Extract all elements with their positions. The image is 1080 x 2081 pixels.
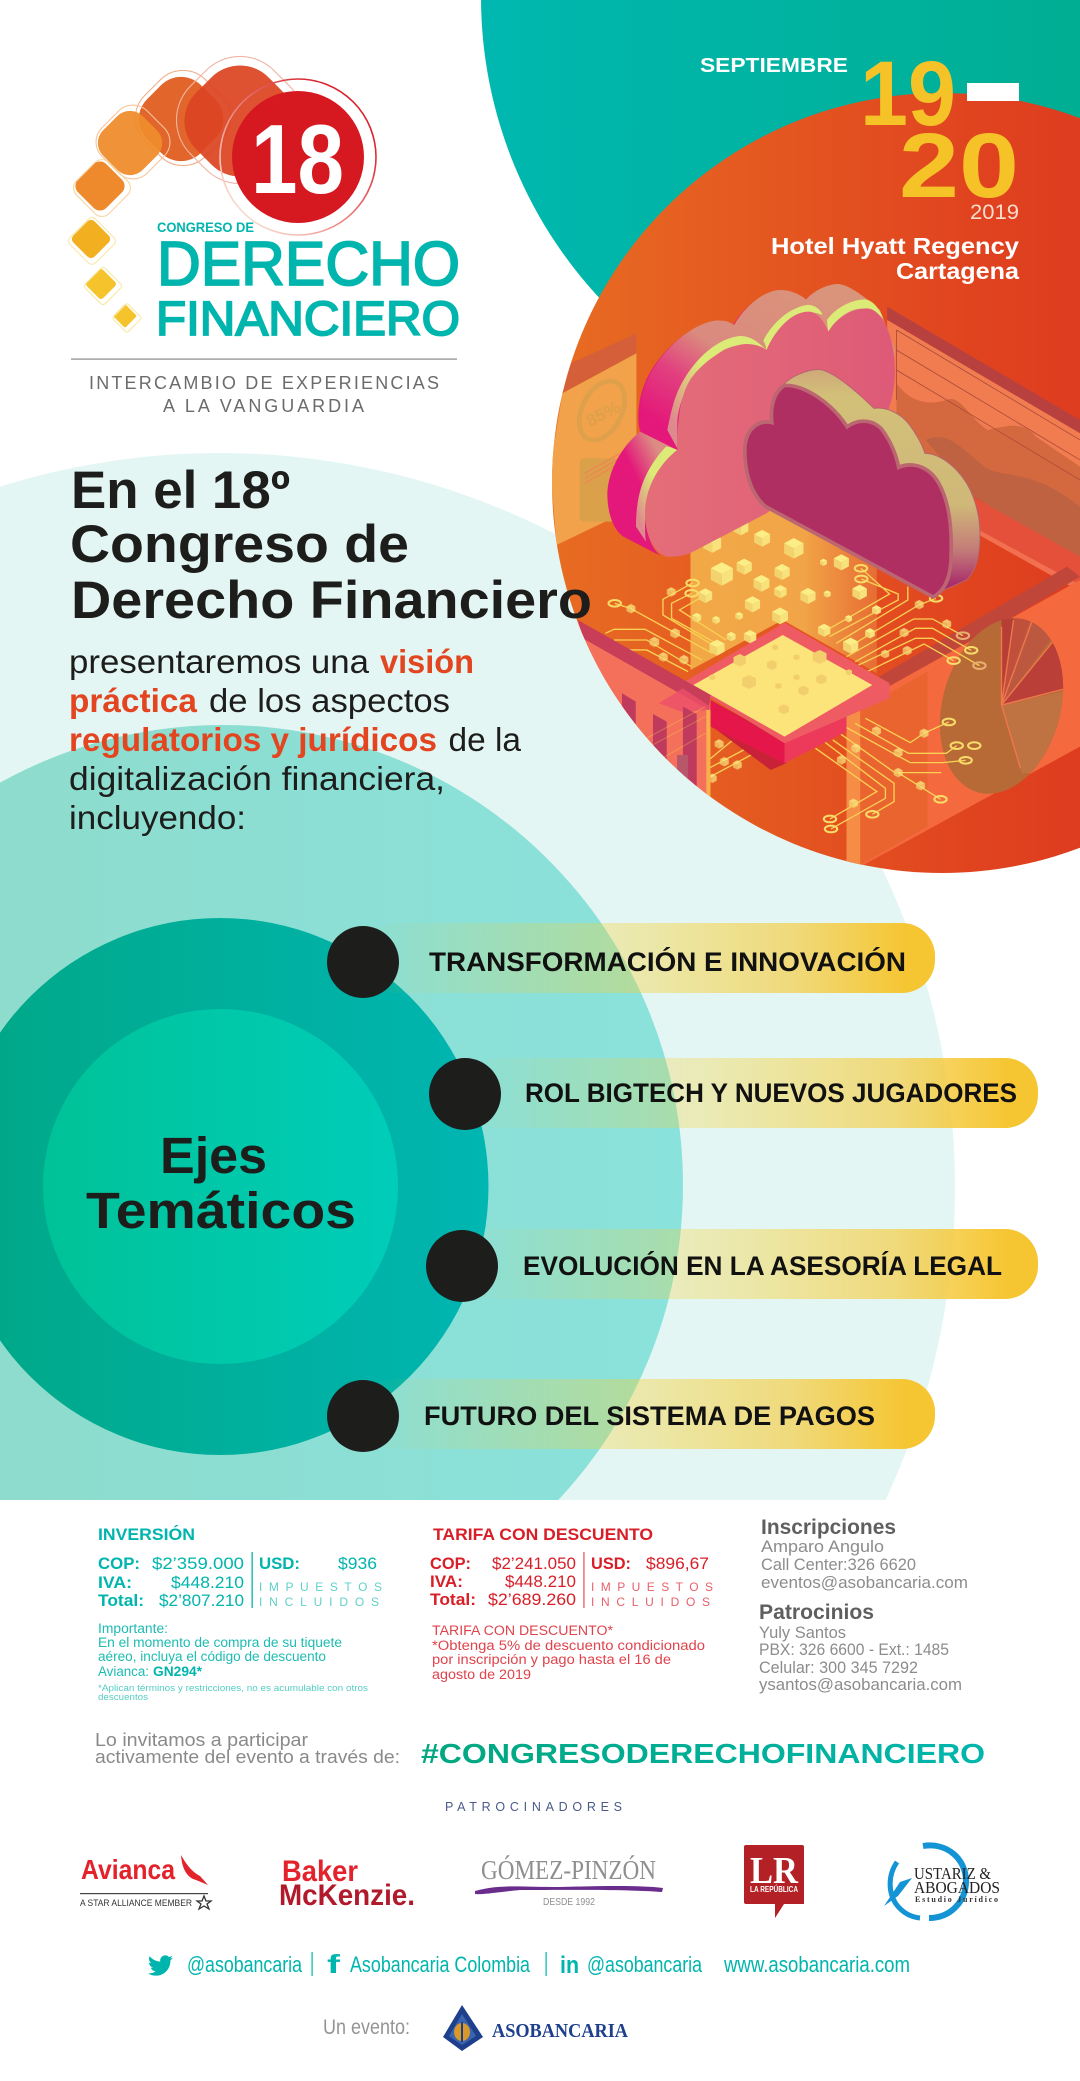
price table: $2’359.000 — [152, 1554, 244, 1573]
sponsor logo: Gómez-Pinzón — [475, 1855, 663, 1908]
sponsor logo: Baker McKenzie — [279, 1855, 415, 1912]
discount conditions: agosto de 2019 — [432, 1667, 531, 1682]
Asobancaria emblem — [443, 2005, 483, 2051]
intro paragraph: regulatorios y jurídicos — [69, 721, 437, 758]
linkedin handle: @asobancaria — [587, 1952, 703, 1977]
discount conditions — [432, 1623, 705, 1682]
discount price table — [430, 1552, 709, 1609]
logo: 18 Congreso de Derecho Financiero — [67, 37, 460, 416]
discount conditions: TARIFA CON DESCUENTO* — [432, 1623, 614, 1638]
purple cloud front face — [747, 387, 949, 595]
processor chip — [685, 623, 890, 770]
pink cloud front face — [645, 308, 895, 557]
price table — [98, 1552, 377, 1610]
hashtag: #CONGRESODERECHOFINANCIERO — [421, 1738, 985, 1769]
discount price table: $2’241.050 — [492, 1554, 576, 1573]
price table: Total: — [98, 1591, 144, 1610]
Asobancaria wordmark: ASOBANCARIA — [492, 2020, 629, 2042]
intro paragraph: de la — [448, 721, 522, 758]
sponsorships contact: ysantos@asobancaria.com — [759, 1675, 962, 1694]
logo wordmark: DERECHO — [157, 230, 460, 299]
sponsor logo: Gómez-Pinzón: DESDE 1992 — [543, 1896, 595, 1908]
registrations contact: eventos@asobancaria.com — [761, 1573, 968, 1592]
circuit ring terminals — [609, 565, 986, 832]
terms footnote: descuentos — [98, 1692, 149, 1702]
lower scene — [578, 510, 1080, 865]
main heading: Derecho Financiero — [71, 571, 592, 630]
left data panel: 85% — [582, 397, 624, 430]
sponsor logo: Avianca: A STAR ALLIANCE MEMBER — [80, 1898, 192, 1909]
logo tagline: A LA VANGUARDIA — [163, 396, 364, 416]
invitation text: activamente del evento a través de: — [95, 1746, 400, 1767]
pricing: tarifa con descuento — [430, 1526, 713, 1682]
discount taxes note: IMPUESTOS — [591, 1580, 713, 1594]
theme 1 — [327, 923, 935, 998]
theme 4 — [327, 1379, 935, 1452]
discount price table: $2’689.260 — [488, 1590, 576, 1609]
website: www.asobancaria.com — [723, 1952, 910, 1977]
discount heading: TARIFA CON DESCUENTO — [433, 1526, 653, 1544]
airline discount note: aéreo, incluya el código de descuento — [98, 1649, 326, 1664]
discount price table: $448.210 — [505, 1572, 576, 1591]
date dash — [967, 83, 1019, 101]
taxes included note: INCLUIDOS — [259, 1595, 379, 1609]
registrations contact: Amparo Angulo — [761, 1537, 884, 1556]
sponsor logo: Avianca — [80, 1854, 211, 1909]
price table: USD: — [259, 1554, 300, 1573]
invitation text — [95, 1729, 400, 1767]
pricing: inversión — [98, 1525, 382, 1702]
price table: IVA: — [98, 1573, 132, 1592]
logo tagline — [71, 358, 457, 416]
year: 2019 — [970, 201, 1019, 224]
venue: Cartagena — [896, 258, 1019, 284]
discount price table: Total: — [430, 1590, 476, 1609]
icon: linkedin: in — [560, 1952, 579, 1979]
inversión heading: INVERSIÓN — [98, 1525, 195, 1544]
medium aqua circle — [0, 725, 683, 1500]
sponsor logo: Ustariz & Abogados — [884, 1845, 1000, 1918]
terms footnote — [98, 1683, 369, 1702]
sponsor logo: Baker McKenzie: McKenzie. — [279, 1879, 415, 1912]
invitation text: Lo invitamos a participar — [95, 1729, 308, 1750]
airline discount note: GN294* — [153, 1664, 203, 1679]
taxes included note — [259, 1580, 382, 1609]
pink cloud yellow highlights — [636, 299, 883, 542]
discount price table: COP: — [430, 1554, 471, 1573]
sponsor logo: Gómez-Pinzón: GÓMEZ-PINZÓN — [481, 1855, 656, 1885]
discount taxes note: INCLUIDOS — [591, 1595, 710, 1609]
orange circle backdrop — [552, 93, 1080, 873]
logo wordmark — [156, 219, 460, 346]
floating data cubes — [626, 519, 951, 808]
central title: Ejes Temáticos: Temáticos — [86, 1182, 356, 1239]
day 19: 19 — [860, 43, 956, 145]
logo tagline: INTERCAMBIO DE EXPERIENCIAS — [89, 373, 439, 393]
isometric scene clipped to circle — [550, 284, 1080, 867]
airline discount note: Importante: — [98, 1621, 168, 1636]
sponsor logo: La República — [744, 1845, 804, 1918]
theme 3 — [426, 1229, 1038, 1302]
venue — [771, 233, 1019, 284]
central title: Ejes Temáticos — [86, 1127, 356, 1239]
inner green circle — [43, 1009, 398, 1364]
price table: $936 — [338, 1554, 377, 1573]
intro paragraph: digitalización financiera, — [69, 760, 445, 797]
sponsor logo: La República: LR — [750, 1850, 798, 1892]
day 20: 20 — [899, 115, 1019, 217]
pie chart — [940, 618, 1064, 794]
sponsor logo: Ustariz & Abogados: USTARIZ & — [914, 1864, 991, 1883]
pink cloud — [607, 284, 895, 557]
discount price table: $896,67 — [646, 1554, 709, 1573]
sponsorships contact: PBX: 326 6600 - Ext.: 1485 — [759, 1640, 949, 1659]
theme 2: ROL BIGTECH Y NUEVOS JUGADORES — [525, 1078, 1017, 1108]
social media row — [148, 1949, 910, 1979]
logo wordmark: FINANCIERO — [156, 293, 460, 346]
price table: $448.210 — [171, 1573, 244, 1592]
upper panels — [550, 307, 1080, 592]
discount conditions: por inscripción y pago hasta el 16 de — [432, 1652, 671, 1667]
sponsor logo: Baker McKenzie: Baker — [282, 1855, 358, 1888]
purple cloud — [747, 369, 980, 595]
central title: Ejes Temáticos: Ejes — [160, 1127, 267, 1184]
logo diamonds trail — [67, 37, 323, 333]
sponsor logo: Ustariz & Abogados: ABOGADOS — [914, 1878, 1000, 1897]
sponsorships contact: Patrocinios — [759, 1601, 874, 1624]
icon: facebook: f — [327, 1949, 340, 1979]
discount price table: USD: — [591, 1554, 631, 1573]
facebook name: Asobancaria Colombia — [350, 1952, 531, 1977]
left data panel — [550, 333, 636, 545]
intro paragraph: visión — [380, 643, 474, 680]
red circle with number 18 — [220, 79, 376, 235]
social invitation — [95, 1729, 985, 1769]
main heading — [70, 461, 592, 630]
theme 3: EVOLUCIÓN EN LA ASESORÍA LEGAL — [523, 1250, 1002, 1281]
intro paragraph: de los aspectos — [209, 682, 450, 719]
circuit traces — [605, 568, 979, 829]
red circle with number 18: 18 — [251, 104, 344, 214]
price table: COP: — [98, 1554, 140, 1573]
intro paragraph: presentaremos una — [69, 643, 370, 680]
registrations contact: Call Center:326 6620 — [761, 1555, 916, 1574]
venue: Hotel Hyatt Regency — [771, 233, 1019, 259]
airline discount note: Avianca: — [98, 1664, 149, 1679]
pale aqua circle — [0, 453, 955, 1500]
sponsorships contact — [759, 1601, 962, 1694]
contact information — [759, 1516, 968, 1694]
sponsor logo: La República: LA REPÚBLICA — [750, 1885, 798, 1894]
circular illustration: cloud and chip — [550, 93, 1080, 873]
theme 1: TRANSFORMACIÓN E INNOVACIÓN — [429, 946, 906, 977]
main heading: En el 18º — [71, 461, 290, 520]
purple cloud side face — [783, 369, 980, 595]
price table: $2’807.210 — [159, 1591, 244, 1610]
sponsor logo: Ustariz & Abogados: Estudio Jurídico — [915, 1895, 998, 1904]
discount conditions: *Obtenga 5% de descuento condicionado — [432, 1638, 705, 1653]
pink cloud side faces — [607, 284, 895, 557]
intro paragraph — [69, 643, 522, 836]
pie chart panel — [847, 567, 1080, 867]
sponsor logo: Avianca: Avianca — [81, 1854, 175, 1885]
airline discount note — [98, 1621, 342, 1679]
discount taxes note — [591, 1580, 713, 1609]
bar chart panel — [574, 620, 710, 800]
airline discount note: En el momento de compra de su tiquete — [98, 1635, 342, 1650]
sponsorships contact: Yuly Santos — [759, 1623, 846, 1642]
registrations contact — [761, 1516, 968, 1592]
sponsorships contact: Celular: 300 345 7292 — [759, 1658, 918, 1677]
registrations contact: Inscripciones — [761, 1516, 896, 1539]
data column of light — [690, 510, 877, 673]
icon: twitter — [148, 1955, 173, 1976]
taxes included note: IMPUESTOS — [259, 1580, 382, 1594]
twitter handle: @asobancaria — [187, 1952, 303, 1977]
terms footnote: *Aplican términos y restricciones, no es acumulable con otros — [98, 1683, 369, 1693]
logo wordmark: CONGRESO DE — [157, 219, 254, 235]
intro paragraph: incluyendo: — [69, 799, 246, 836]
background circles — [0, 0, 1080, 1500]
un evento label: Un evento: — [323, 2016, 410, 2039]
event date and venue — [700, 43, 1019, 284]
intro paragraph: práctica — [69, 682, 198, 719]
main heading: Congreso de — [70, 515, 409, 574]
theme 2 — [429, 1058, 1038, 1130]
sponsors heading: PATROCINADORES — [445, 1800, 622, 1814]
organiser: Asobancaria — [323, 2005, 629, 2051]
theme 4: FUTURO DEL SISTEMA DE PAGOS — [424, 1401, 875, 1431]
month label: SEPTIEMBRE — [700, 54, 848, 77]
dark teal circle — [0, 918, 488, 1455]
right area chart panel — [887, 307, 1080, 592]
teal top circle — [481, 0, 1080, 298]
discount price table: IVA: — [430, 1572, 463, 1591]
